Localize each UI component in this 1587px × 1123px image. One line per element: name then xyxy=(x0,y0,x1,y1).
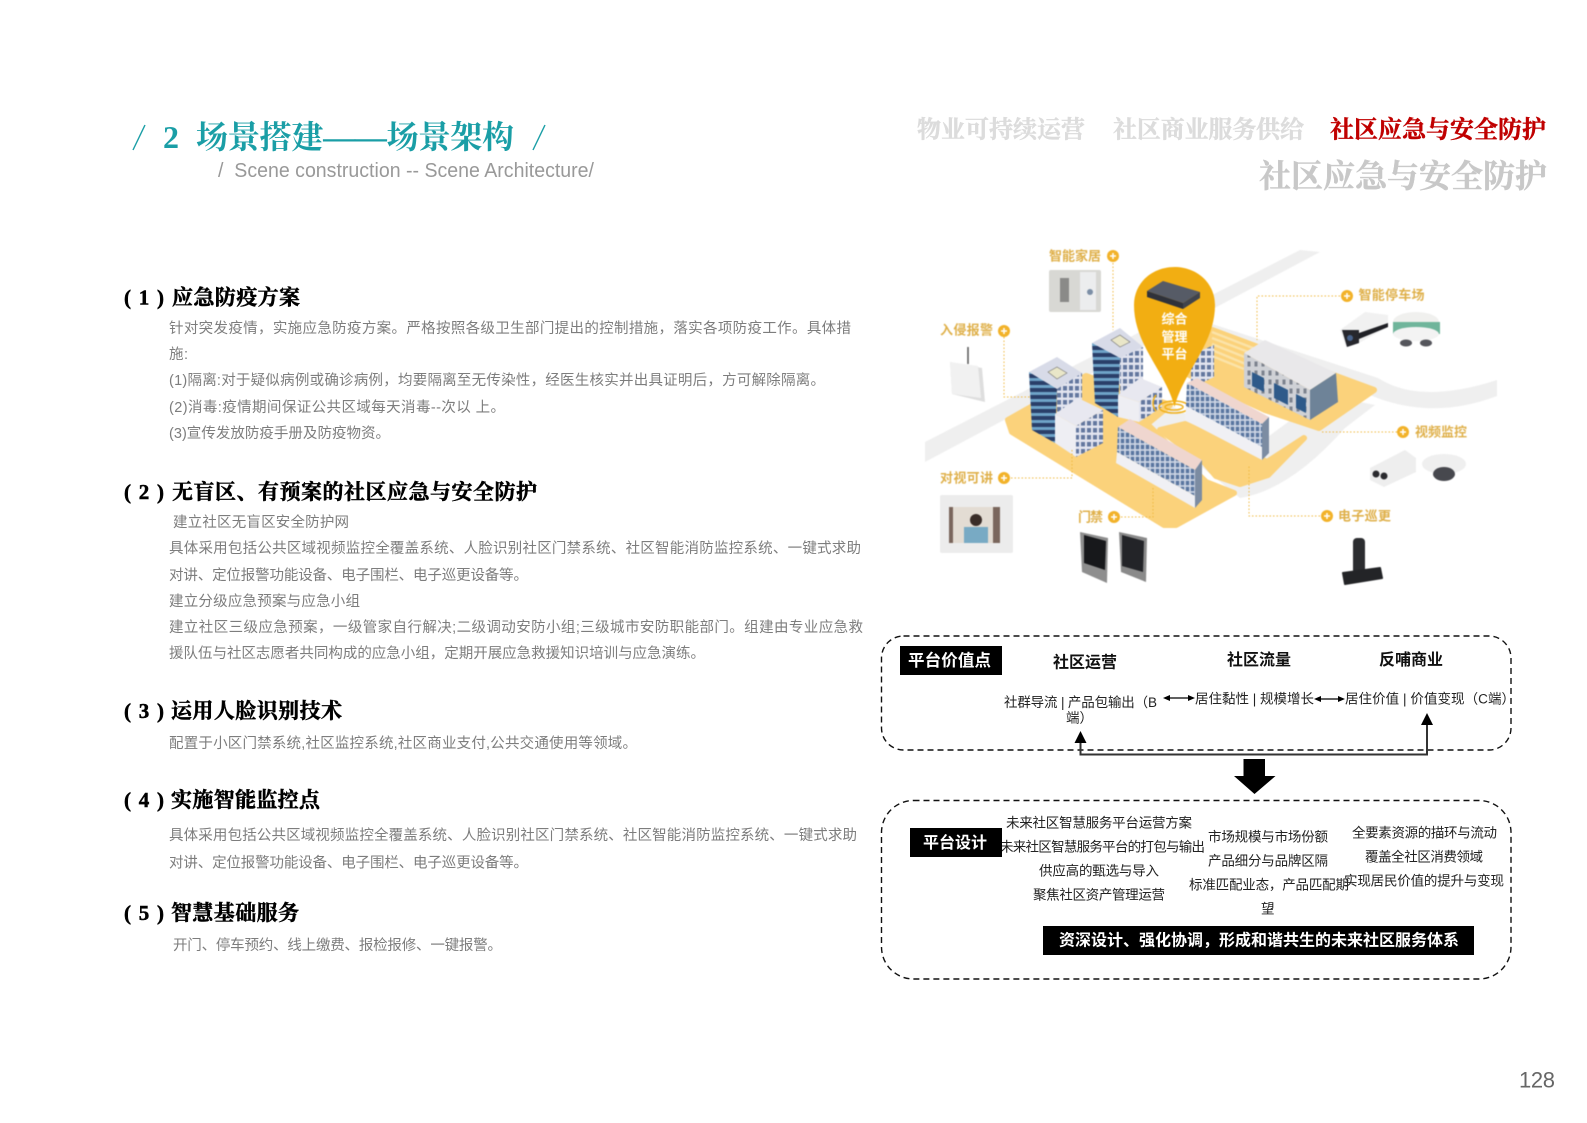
column 2 text: 望 xyxy=(1261,902,1274,916)
column 3 text: 实现居民价值的提升与变现 xyxy=(1344,874,1504,888)
callout: video intercom xyxy=(940,470,1013,553)
text block 3 xyxy=(124,699,637,752)
text block 1: (3)宣传发放防疫手册及防疫物资。 xyxy=(169,425,390,442)
text block 3: 配置于小区门禁系统,社区监控系统,社区商业支付,公共交通使用等领域。 xyxy=(169,734,637,752)
column headings: 社区运营 xyxy=(1053,652,1117,672)
navigation tabs xyxy=(917,116,1546,144)
column headings xyxy=(1053,650,1443,672)
building: tower 2 xyxy=(1092,328,1162,422)
label: platform design: 平台设计 xyxy=(923,833,987,852)
column headings: 反哺商业 xyxy=(1379,651,1443,669)
text block 2: 建立分级应急预案与应急小组 xyxy=(169,592,360,610)
value chain text: 居住价值 | 价值变现（C端） xyxy=(1345,692,1515,706)
text block 2: 援队伍与社区志愿者共同构成的应急小组，定期开展应急救援知识培训与应急演练。 xyxy=(169,644,705,662)
title: 2 xyxy=(163,119,179,155)
text block 1: (1) xyxy=(124,286,164,310)
label: platform design xyxy=(910,828,1002,857)
label: platform value: 平台价值点 xyxy=(908,650,991,670)
column 2 text: 标准匹配业态，产品匹配期 xyxy=(1189,878,1349,892)
roads xyxy=(925,250,1497,498)
text block 2: 无盲区、有预案的社区应急与安全防护 xyxy=(172,480,537,504)
column 3 text: 覆盖全社区消费领域 xyxy=(1365,848,1483,864)
text block 5: 智慧基础服务 xyxy=(171,901,299,925)
title: 场景搭建——场景架构 xyxy=(196,119,514,155)
text block 4 xyxy=(124,788,857,872)
crosswalk xyxy=(1212,332,1258,369)
navigation tabs: 社区商业服务供给 xyxy=(1113,116,1304,144)
navigation tabs: 社区应急与安全防护 xyxy=(1330,116,1546,144)
arrow: feedback connector xyxy=(1074,713,1433,754)
text block 1: 针对突发疫情，实施应急防疫方案。严格按照各级卫生部门提出的控制措施，落实各项防疫工作。具体措 xyxy=(169,319,851,337)
text block 5 xyxy=(124,901,502,954)
callout: access control: 门禁 xyxy=(1078,510,1103,524)
column 1 text xyxy=(1000,814,1205,902)
column 1 text: 未来社区智慧服务平台运营方案 xyxy=(1006,814,1192,830)
map pin: integrated management platform: 平台 xyxy=(1161,346,1188,362)
value chain text: 社群导流 | 产品包输出（B xyxy=(1004,695,1157,710)
building: tower 1 xyxy=(1029,357,1103,457)
text block 2: 建立社区无盲区安全防护网 xyxy=(173,513,349,531)
callout: video intercom: 对视可讲 xyxy=(940,470,993,486)
callout: intrusion alarm: 入侵报警 xyxy=(940,322,993,338)
arrow: double between flow and C xyxy=(1314,696,1345,702)
navigation tabs: 物业可持续运营 xyxy=(917,116,1085,144)
value chain text: 居住黏性 | 规模增长 xyxy=(1195,692,1314,706)
column 3 text xyxy=(1344,824,1504,888)
yellow ground blocks xyxy=(1008,330,1374,525)
column 2 text xyxy=(1189,828,1349,916)
text block 5: 开门、停车预约、线上缴费、报检报修、一键报警。 xyxy=(173,937,502,954)
building: slab lower xyxy=(1116,419,1202,508)
text block 5: (5) xyxy=(124,901,164,925)
callout: smart home: 智能家居 xyxy=(1049,248,1101,264)
callout: smart parking: 智能停车场 xyxy=(1358,288,1424,302)
callout: video surveillance: 视频监控 xyxy=(1415,424,1467,440)
column 1 text: 未来社区智慧服务平台的打包与输出 xyxy=(1000,838,1205,854)
callout: access control xyxy=(1078,510,1147,583)
panel: platform design xyxy=(882,800,1511,979)
text block 4: 具体采用包括公共区域视频监控全覆盖系统、人脸识别社区门禁系统、社区智能消防监控系统、一键式求助 xyxy=(169,826,857,844)
back tower xyxy=(1191,345,1214,388)
arrow: double between B and flow xyxy=(1163,695,1195,701)
text block 2: 建立社区三级应急预案，一级管家自行解决;二级调动安防小组;三级城市安防职能部门。组建由专业应急救 xyxy=(169,618,863,636)
column 2 text: 产品细分与品牌区隔 xyxy=(1208,852,1328,868)
text block 2 xyxy=(124,480,863,662)
panel: platform value points xyxy=(882,636,1515,754)
column 1 text: 聚焦社区资产管理运营 xyxy=(1033,888,1165,902)
text block 1: (1)隔离:对于疑似病例或确诊病例，均要隔离至无传染性，经医生核实并出具证明后，方可解除隔离。 xyxy=(169,372,825,389)
arrow: big down xyxy=(1234,759,1276,794)
page number: 128 xyxy=(1519,1068,1555,1092)
callout: electronic patrol: 电子巡更 xyxy=(1338,508,1391,524)
text block 4: 实施智能监控点 xyxy=(171,788,322,812)
text block 1: 施: xyxy=(169,346,188,363)
value chain text: 端） xyxy=(1066,710,1093,726)
building: block right xyxy=(1244,340,1338,420)
column 3 text: 全要素资源的描环与流动 xyxy=(1352,824,1497,840)
pin shadow rings xyxy=(1153,395,1189,413)
text block 4: 对讲、定位报警功能设备、电子围栏、电子巡更设备等。 xyxy=(169,854,528,872)
subtitle: / Scene construction -- Scene Architecture/ xyxy=(218,160,594,182)
text block 2: 具体采用包括公共区域视频监控全覆盖系统、人脸识别社区门禁系统、社区智能消防监控系统、一键式求助 xyxy=(169,539,861,557)
illustration: smart community map xyxy=(925,248,1497,584)
text block 1 xyxy=(124,286,851,442)
text block 2: (2) xyxy=(124,480,164,504)
column 1 text: 供应高的甄选与导入 xyxy=(1039,862,1160,878)
summary bar xyxy=(1043,926,1474,955)
callout: electronic patrol xyxy=(1321,508,1391,584)
column headings: 社区流量 xyxy=(1227,650,1291,669)
text block 3: 运用人脸识别技术 xyxy=(171,699,342,723)
text block 4: (4) xyxy=(124,788,164,812)
callout: smart home xyxy=(1049,248,1119,312)
text block 2: 对讲、定位报警功能设备、电子围栏、电子巡更设备等。 xyxy=(169,566,528,584)
map pin: integrated management platform xyxy=(1134,267,1215,407)
leader lines xyxy=(1004,263,1397,517)
callout: video surveillance xyxy=(1370,424,1467,487)
callout: intrusion alarm xyxy=(940,322,1010,402)
text block 3: (3) xyxy=(124,699,164,723)
value chain text xyxy=(1004,692,1515,726)
map pin: integrated management platform: 综合 xyxy=(1161,312,1188,326)
callout: smart parking xyxy=(1340,288,1440,347)
section heading: 社区应急与安全防护 xyxy=(1259,158,1547,194)
map pin: integrated management platform: 管理 xyxy=(1161,330,1188,344)
column 2 text: 市场规模与市场份额 xyxy=(1208,828,1328,844)
text block 1: 应急防疫方案 xyxy=(172,286,300,310)
building: slab upper xyxy=(1185,378,1269,460)
summary bar: 资深设计、强化协调，形成和谐共生的未来社区服务体系 xyxy=(1059,930,1459,950)
text block 1: (2)消毒:疫情期间保证公共区域每天消毒--次以 上。 xyxy=(169,399,505,416)
label: platform value xyxy=(900,646,1002,675)
